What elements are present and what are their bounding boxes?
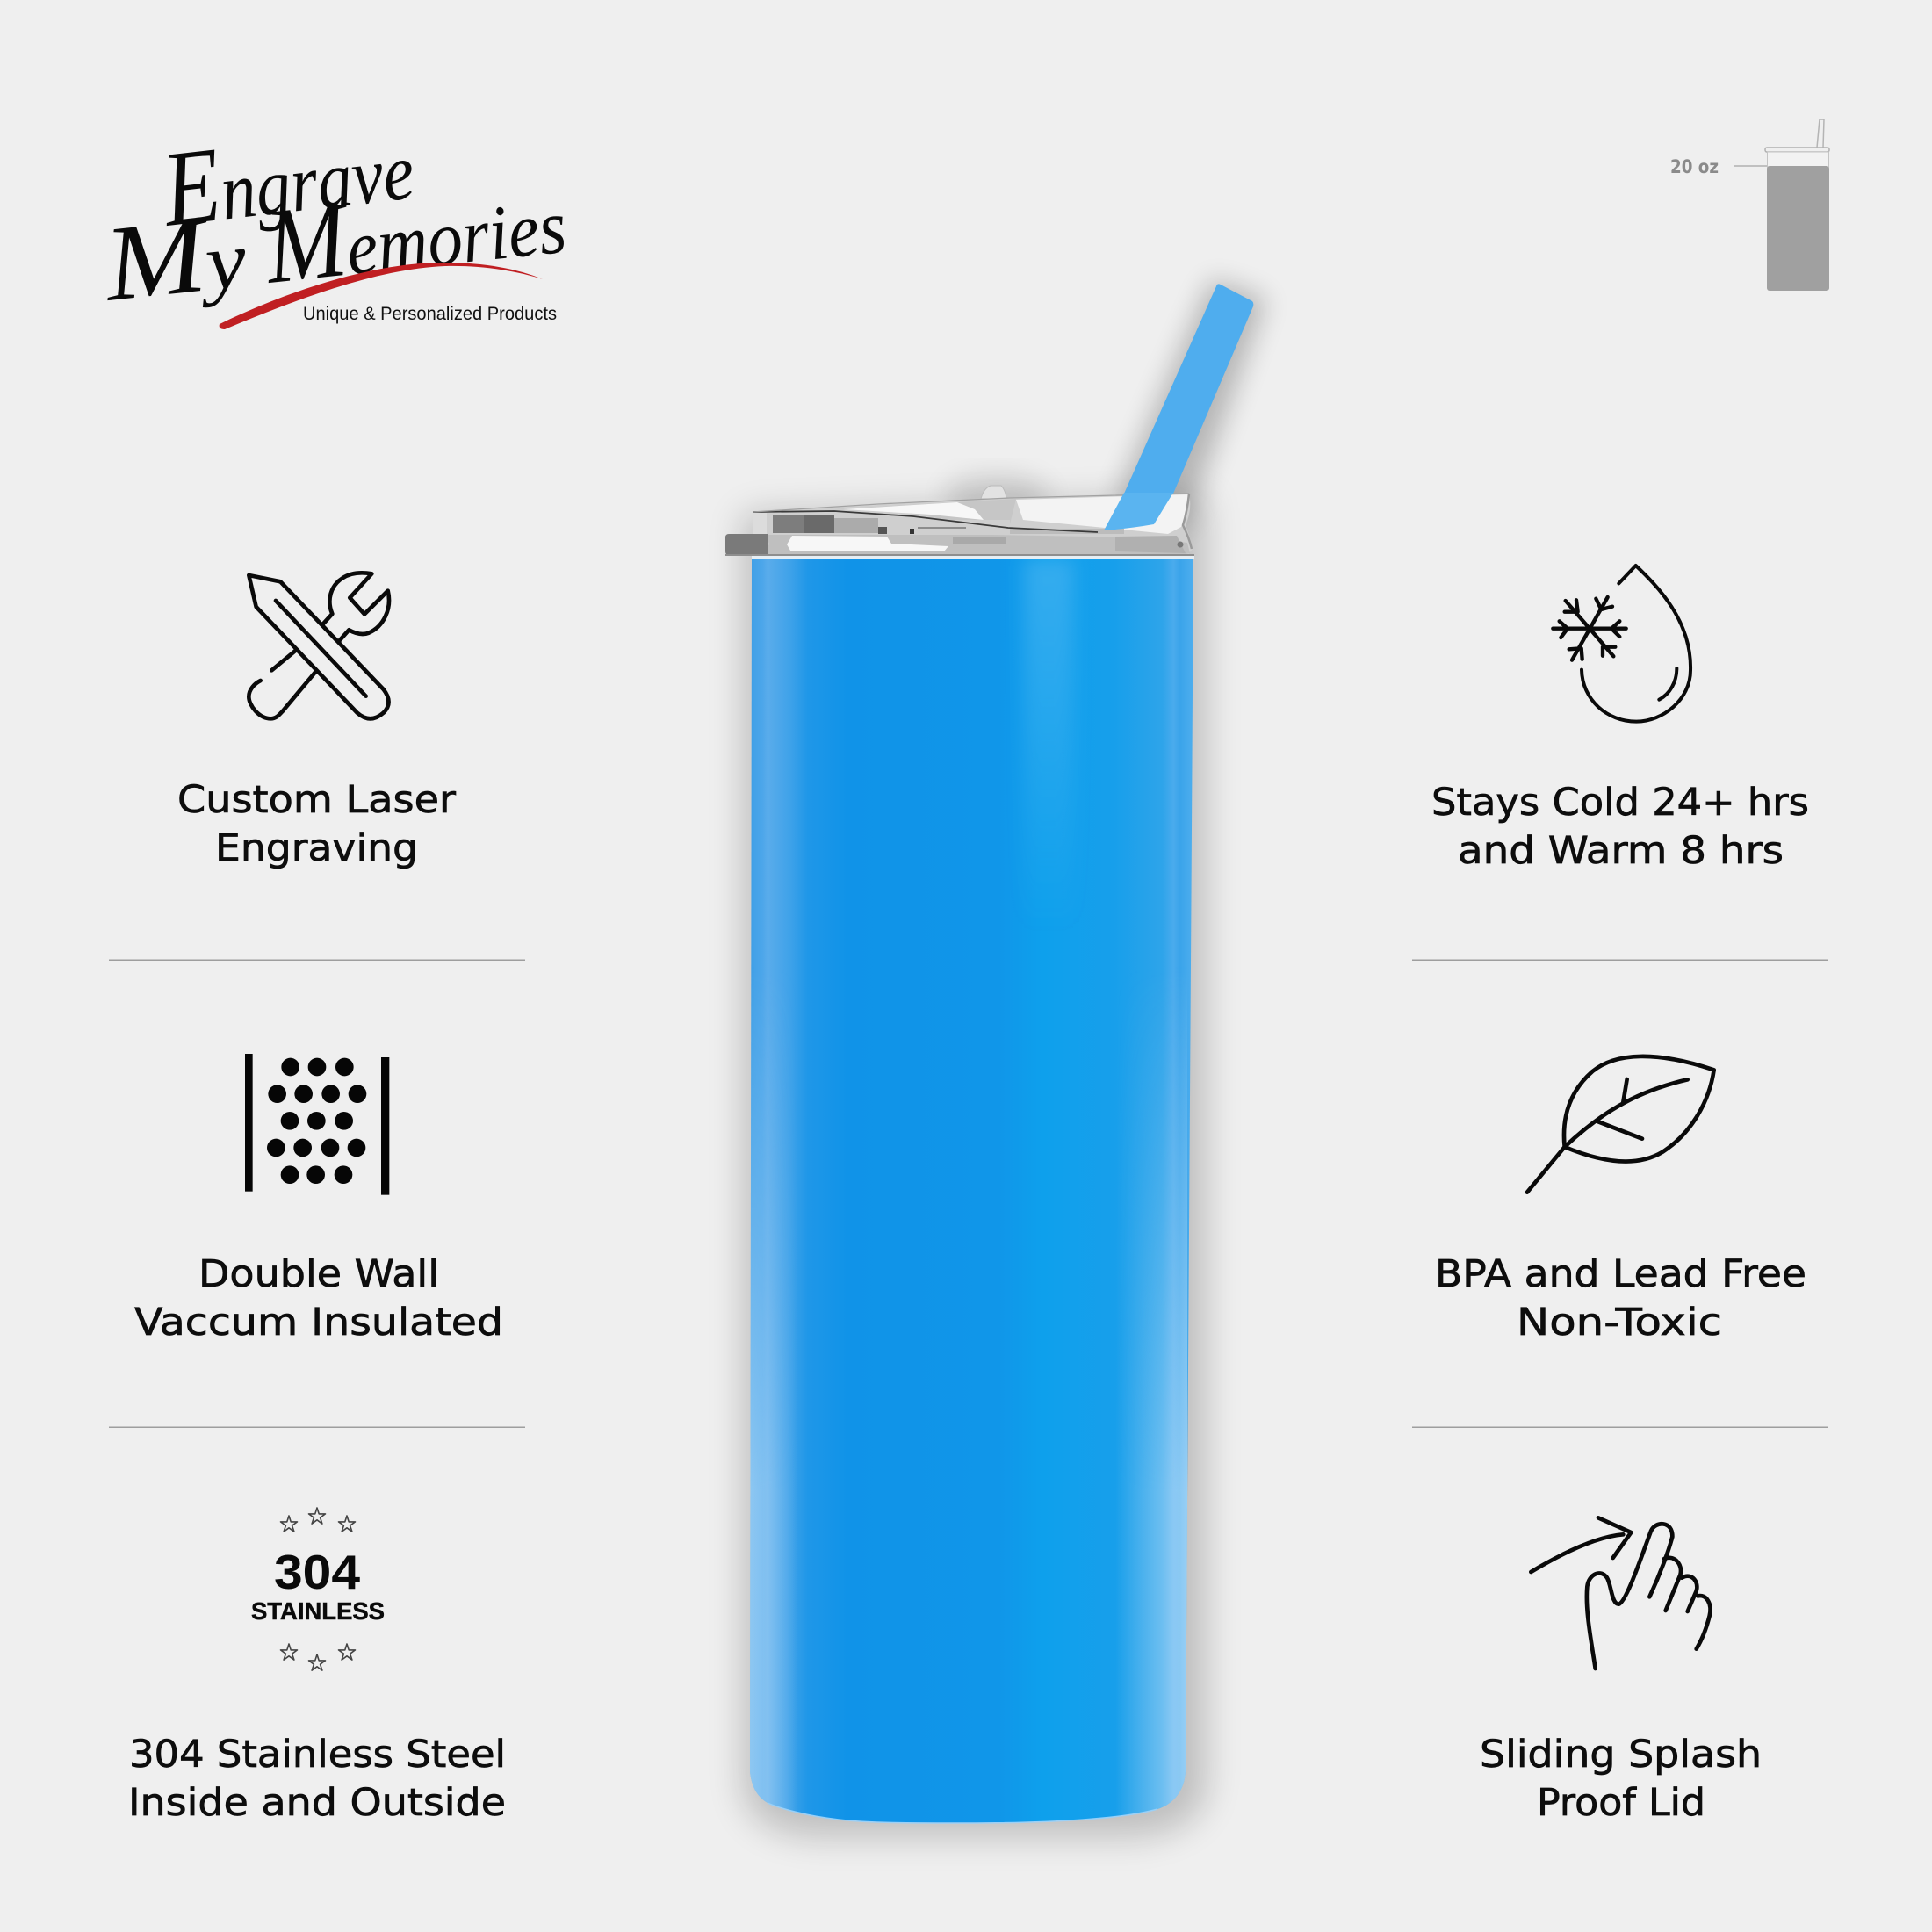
text: sliding lid: [1480, 1733, 1762, 1825]
icon: 304 stainless badge: STAINLESS: [251, 1597, 385, 1625]
text: bpa free: Non-Toxic: [1517, 1301, 1722, 1344]
logo: [97, 103, 571, 329]
divider right 2: [1412, 1426, 1828, 1428]
lid left clear strip: [753, 513, 767, 534]
panel: custom laser engraving: [177, 573, 456, 870]
lid dark block: [773, 515, 808, 533]
text: double wall: [134, 1252, 503, 1344]
tumbler shadow: [743, 496, 1207, 1837]
text: custom laser engraving: Custom Laser: [177, 778, 456, 822]
body lower edge glow left: [750, 1024, 793, 1811]
text: bpa free: [1435, 1252, 1806, 1344]
text: 304 stainless steel: [128, 1733, 506, 1825]
body light band: [1024, 559, 1073, 928]
text: stays cold: and Warm 8 hrs: [1458, 829, 1784, 873]
pin shadow: [944, 475, 1049, 517]
panel: double wall: [134, 1054, 503, 1344]
text: sliding lid: Proof Lid: [1537, 1781, 1705, 1825]
lid upper highlight: [843, 502, 984, 520]
lid slots: [878, 527, 887, 534]
icon: 304 stainless badge: [251, 1508, 385, 1670]
lid: [725, 486, 1194, 559]
lid slanted top edge: [753, 494, 1189, 512]
lid dark edge: [753, 511, 1098, 532]
text: stays cold: Stays Cold 24+ hrs: [1431, 781, 1809, 825]
panel: sliding lid: [1480, 1517, 1762, 1825]
straw upper: [1124, 284, 1253, 494]
straw inside lid: [1104, 493, 1173, 530]
icon: crossed tools: [249, 573, 389, 718]
lid edge lip: [1183, 494, 1192, 549]
divider left 2: [109, 1426, 525, 1428]
icon: leaf: [1527, 1056, 1714, 1193]
text: custom laser engraving: Engraving: [215, 826, 418, 870]
capacity label: 20 oz: [1670, 156, 1719, 177]
text: double wall: Vaccum Insulated: [134, 1301, 503, 1344]
tumbler body: [750, 559, 1193, 1823]
capacity leader line: [1734, 165, 1767, 167]
lid lower band: [752, 535, 1190, 556]
icon: insulation dots: [245, 1054, 389, 1195]
lid pin: [981, 486, 1006, 499]
mini tumbler: [1765, 119, 1829, 291]
lid slide tab: [725, 534, 768, 555]
panel: bpa free: [1435, 1056, 1806, 1344]
text: stays cold: [1431, 781, 1809, 873]
lid bottom gasket: [725, 554, 1194, 556]
text: bpa free: BPA and Lead Free: [1435, 1252, 1806, 1296]
icon: drop with snowflake: [1553, 566, 1690, 722]
straw shadow: [1115, 279, 1266, 527]
text: 304 stainless steel: Inside and Outside: [128, 1781, 506, 1825]
logo tagline: Unique & Personalized Products: [303, 304, 557, 324]
panel: 304 stainless: [128, 1508, 506, 1825]
tumbler product image: [725, 279, 1266, 1837]
lid mirrored panel: [834, 499, 1016, 524]
stars: [281, 1508, 355, 1670]
lid base: [753, 494, 1193, 556]
logo red swoosh: [220, 263, 543, 329]
lid right grey section: [1115, 536, 1186, 553]
lid small details: [953, 537, 1006, 544]
divider left 1: [109, 959, 525, 961]
icon: swipe hand: [1531, 1517, 1711, 1669]
text: 304 stainless steel: 304 Stainless Steel: [129, 1733, 506, 1777]
logo script: Memories: Memories: [258, 157, 571, 306]
panel: stays cold: [1431, 566, 1809, 873]
body light bottom rim: [768, 1803, 1157, 1823]
text: double wall: Double Wall: [198, 1252, 439, 1296]
body lower edge glow right: [1121, 1019, 1187, 1815]
lid upper right clear panel: [1016, 494, 1189, 534]
text: custom laser engraving: [177, 778, 456, 870]
lid white streak: [787, 536, 948, 551]
text: sliding lid: Sliding Splash: [1480, 1733, 1762, 1777]
icon: 304 stainless badge: 304: [274, 1545, 360, 1599]
body overlays: [750, 559, 1187, 1835]
logo script: My: My: [97, 191, 251, 324]
divider right 1: [1412, 959, 1828, 961]
lid hinge: [1177, 541, 1184, 548]
logo script: Engrave: Engrave: [155, 103, 419, 249]
capacity indicator: 20 oz: [1670, 119, 1829, 291]
